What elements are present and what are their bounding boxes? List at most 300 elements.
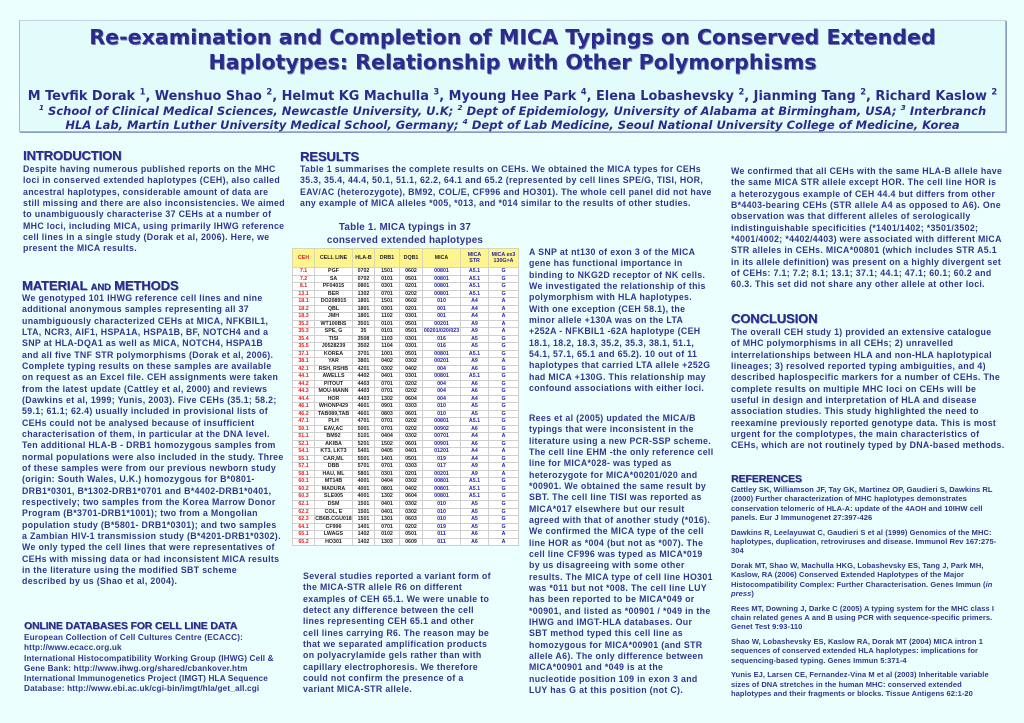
table 1: MICA typings: 0801 xyxy=(381,486,393,492)
text: references: Yunis EJ, Larsen CE, Fernandez-Vina M et al (2003) Inheritable variable xyxy=(731,670,989,679)
table 1: MICA typings: A5.1 xyxy=(469,418,480,424)
text: Rees et al: agreed with that of another study (*016). xyxy=(529,515,710,525)
text: Rees et al: *00901. We obtained the same result by xyxy=(529,481,706,491)
affiliations xyxy=(39,103,986,132)
table 1: MICA typings: G xyxy=(501,456,506,462)
table 1: MICA typings: 51.1 xyxy=(298,433,309,439)
table 1: MICA typings: WT100BIS xyxy=(321,321,346,327)
table 1: MICA typings: 004 xyxy=(437,388,446,394)
text: Rees et al: MICA*00901 and *049 is at the xyxy=(529,662,663,672)
text: introduction: present the MICA results. xyxy=(23,243,137,253)
text: variant form of R6: the MICA-STR allele R6 on different xyxy=(303,582,462,592)
table 1: MICA typings: 00201 xyxy=(434,358,449,364)
text: HLA-B allele confirmation: indistinguishable specificities (*1401/1402; *3501/3502; xyxy=(731,223,978,233)
table 1: MICA typings: HO301 xyxy=(325,539,342,545)
text: material and methods: respectively; two samples from the Korea Marrow Donor xyxy=(22,497,276,507)
table 1: MICA typings: 0701 xyxy=(381,426,393,432)
table 1: MICA typings: 1501 xyxy=(381,268,393,274)
table 1: MICA typings: 0302 xyxy=(405,508,417,514)
text: references: Rees MT, Downing J, Darke C (2005) A typing system for the MHC class I xyxy=(731,604,994,613)
table 1: MICA typings: HAU, ML xyxy=(322,471,345,477)
heading: online databases: ONLINE DATABASES FOR CELL LINE DATA xyxy=(24,621,237,632)
table 1: MICA typings: 0701 xyxy=(381,388,393,394)
text: SNP at nt130: With one exception (CEH 58.1), the xyxy=(529,304,685,314)
text: HLA-B allele confirmation: We confirmed that all CEHs with the same HLA-B allele have xyxy=(731,166,1002,176)
table 1: MICA typings: G xyxy=(501,501,506,507)
text: variant form of R6: could not confirm the presence of a xyxy=(303,673,464,683)
table 1: MICA typings: A4 xyxy=(471,448,478,454)
table 1: MICA typings: 35.3 xyxy=(298,328,309,334)
table 1: MICA typings: 016 xyxy=(437,343,446,349)
table 1: MICA typings: HLA-B xyxy=(355,255,372,261)
table 1: MICA typings: G xyxy=(501,524,506,530)
table 1: MICA typings: 1401 xyxy=(358,524,369,530)
table 1: MICA typings: A4 xyxy=(471,396,478,402)
table 1: MICA typings: A9 xyxy=(471,358,478,364)
text: HLA-B allele confirmation: a heterozygous example of CEH 44.4 but differs from other xyxy=(731,189,995,199)
text: introduction: still missing and there are also inconsistencies. We aimed xyxy=(23,198,285,208)
table 1: MICA typings: 4402 xyxy=(358,373,369,379)
table 1: MICA typings: 001 xyxy=(437,313,446,319)
table 1: MICA typings: 0401 xyxy=(381,501,393,507)
table 1: MICA typings: 57.1 xyxy=(298,463,309,469)
table 1: MICA typings: KOREA xyxy=(324,351,343,357)
table 1: MICA typings: KT3, LKT3 xyxy=(320,448,347,454)
text: references: sizes of DNA stretches in the human MHC: conserved extended xyxy=(731,680,962,689)
table 1: MICA typings: 01201 xyxy=(434,448,449,454)
text: material and methods xyxy=(22,293,284,586)
text: SNP at nt130: haplotypes that carried LTA allele +252G xyxy=(529,360,710,370)
text: SNP at nt130: polymorphism with HLA haplotypes. xyxy=(529,292,692,302)
table 1: MICA typings: 4403 xyxy=(358,396,369,402)
table 1: MICA typings: 010 xyxy=(437,516,446,522)
table 1: MICA typings: 00901 xyxy=(434,441,449,447)
table 1: MICA typings: 0202 xyxy=(405,524,417,530)
table 1: MICA typings: 65.1 xyxy=(298,531,309,537)
table 1: MICA typings: A5 xyxy=(471,343,478,349)
text: online databases: http://www.ecacc.org.uk xyxy=(24,643,122,652)
text: references: Histocompatibility Complex: Further Characterisation. Genes Immun (in xyxy=(731,580,992,589)
table 1: MICA typings: A5.1 xyxy=(469,373,480,379)
table 1: MICA typings: YAR xyxy=(328,358,339,364)
table 1: MICA typings: 0405 xyxy=(381,448,393,454)
table 1: MICA typings: CELL LINE xyxy=(320,255,347,261)
table 1: MICA typings: 4201 xyxy=(358,366,369,372)
table 1: MICA typings: 0402 xyxy=(381,358,393,364)
table 1: MICA typings: 0202 xyxy=(405,381,417,387)
table 1: MICA typings: 44.4 xyxy=(298,396,309,402)
text: references: Kaslow, RA (2006) Conserved Extended Haplotypes of the Major xyxy=(731,570,964,579)
text: SNP at nt130: 54.1, 57.1, 65.1 and 65.2). 10 out of 11 xyxy=(529,349,697,359)
table 1: MICA typings: 0303 xyxy=(405,463,417,469)
table 1: MICA typings: 0501 xyxy=(405,276,417,282)
text: Rees et al: The cell line EHM -the only reference cell xyxy=(529,447,713,457)
affiliations: HLA Lab, Martin Luther University Medical School, Germany; 4 Dept of Lab Medicine, Seoul National University College of Medicine, Korea xyxy=(65,117,960,132)
table 1: MICA typings: 0101 xyxy=(381,276,393,282)
table 1: MICA typings: 0301 xyxy=(381,283,393,289)
table 1: MICA typings: 0801 xyxy=(358,283,369,289)
text: references: conservation telomeric of HLA-A: update of the 4AOH and 10IHW cell xyxy=(731,504,983,513)
table 1: MICA typings: MICA ex3 xyxy=(492,252,515,258)
table 1: MICA typings: 4001 xyxy=(358,478,369,484)
table 1: MICA typings: 0402 xyxy=(405,486,417,492)
text: variant form of R6: Several studies reported a variant form of xyxy=(303,571,491,581)
heading: references: REFERENCES xyxy=(731,473,802,485)
table 1: MICA typings: EAV,AC xyxy=(324,426,343,432)
text: Rees et al: cell line CF996 was typed as MICA*019 xyxy=(529,549,703,559)
text: SNP at nt130: A SNP at nt130 of exon 3 of the MICA xyxy=(529,247,695,257)
table 1: MICA typings: A6 xyxy=(471,539,478,545)
affiliations: 1 School of Clinical Medical Sciences, Newcastle University, U.K; 2 Dept of Epidemiology, University of Alabama at Birmingham, USA; 3 Interbranch xyxy=(39,103,986,118)
table 1: MICA typings: PITOUT xyxy=(324,381,343,387)
table 1: MICA typings: 5001 xyxy=(358,426,369,432)
text: conclusion: useful in design and interpretation of HLA and disease xyxy=(731,395,977,405)
table 1: MICA typings: A5.1 xyxy=(469,276,480,282)
text: SNP at nt130: binding to NKG2D receptor of NK cells. xyxy=(529,270,705,280)
title panel xyxy=(19,20,1006,132)
table 1: MICA typings: 0404 xyxy=(381,478,393,484)
table 1: MICA typings: 0701 xyxy=(381,381,393,387)
text: HLA-B allele confirmation: *4001/4002; *4402/4403) were associated with different MICA xyxy=(731,234,1002,244)
table 1: MICA typings: G xyxy=(501,411,506,417)
table 1: MICA typings: 46.2 xyxy=(298,411,309,417)
table 1: MICA typings: 0404 xyxy=(381,433,393,439)
table 1: MICA typings: HOR xyxy=(328,396,339,402)
text: material and methods: and all five TNF STR polymorphisms (Dorak et al, 2006). xyxy=(22,350,273,360)
table 1: MICA typings: G xyxy=(501,336,506,342)
text: material and methods: on request as an Excel file. CEH assignments were taken xyxy=(22,372,278,382)
text: SNP at nt130: We investigated the relationship of this xyxy=(529,281,706,291)
table 1: MICA typings: 00801 xyxy=(434,291,449,297)
table 1: MICA typings: A xyxy=(502,328,505,334)
text: variant form of R6: capillary electrophoresis. We therefore xyxy=(303,662,478,672)
table 1: MICA typings: G xyxy=(501,373,506,379)
table 1: MICA typings: 1501 xyxy=(358,508,369,514)
text: introduction: ancestral haplotypes, considerable amount of data are xyxy=(23,187,268,197)
table 1: MICA typings: 00801 xyxy=(434,351,449,357)
text: Rees et al: nucleotide position 109 in exon 3 and xyxy=(529,674,698,684)
table 1: MICA typings: 37.1 xyxy=(298,351,309,357)
table 1: MICA typings: 3502 xyxy=(358,343,369,349)
table 1: MICA typings: A6 xyxy=(471,441,478,447)
text: results xyxy=(300,164,712,208)
text: variant form of R6: variant MICA-STR allele. xyxy=(303,684,412,694)
table 1: MICA typings: 55.1 xyxy=(298,456,309,462)
table 1: MICA typings: 010 xyxy=(437,298,446,304)
table 1: MICA typings: 35.5 xyxy=(298,343,309,349)
table 1: MICA typings: 62.2 xyxy=(298,508,309,514)
text: material and methods: SNP at HLA-DQA1 as well as MICA, NOTCH4, HSPA1B xyxy=(22,338,263,348)
table 1: MICA typings: G xyxy=(501,388,506,394)
table 1: MICA typings: 0401 xyxy=(381,508,393,514)
table 1: MICA typings: G xyxy=(501,516,506,522)
text: Rees et al: results. The MICA type of cell line HO301 xyxy=(529,572,713,582)
text: Rees et al: typings that were inconsistent in the xyxy=(529,424,694,434)
text: HLA-B allele confirmation: of CEHs: 7.1; 7.2; 8.1; 13.1; 37.1; 44.1; 47.1; 60.1; 60.2 and xyxy=(731,268,992,278)
table 1: MICA typings: COL, E xyxy=(325,508,342,514)
table 1: MICA typings: 001 xyxy=(437,306,446,312)
table 1: MICA typings: 47.1 xyxy=(298,418,309,424)
table 1: MICA typings: 44.1 xyxy=(298,373,309,379)
table 1: MICA typings: A xyxy=(502,448,505,454)
text: references: (2000) Further characterization of MHC haplotypes demonstrates xyxy=(731,494,967,503)
table 1: MICA typings: 011 xyxy=(437,539,446,545)
table 1: MICA typings: A xyxy=(502,539,505,545)
text: HLA-B allele confirmation: observation was that different alleles of serologically xyxy=(731,211,971,221)
table 1: MICA typings: 0302 xyxy=(405,358,417,364)
table 1: MICA typings: AKIBA xyxy=(325,441,342,447)
table 1: MICA typings: 00201 xyxy=(434,471,449,477)
table 1: MICA typings: TISI xyxy=(329,336,338,342)
table 1: MICA typings: A9 xyxy=(471,463,478,469)
text: results: Table 1 summarises the complete results on CEHs. We obtained the MICA types for CEHs xyxy=(300,164,701,174)
table 1: MICA typings: 004 xyxy=(437,396,446,402)
table 1: MICA typings: 60.1 xyxy=(298,478,309,484)
text: SNP at nt130 xyxy=(529,247,710,393)
text: online databases: International Immunogenetics Project (IMGT) HLA Sequence xyxy=(24,674,268,683)
table 1: MICA typings: A6 xyxy=(471,531,478,537)
table 1: MICA typings: 0301 xyxy=(381,471,393,477)
text: results: EAV/AC (heterozygote), BM92, COL/E, CF996 and HO301). The whole cell panel did not have xyxy=(300,187,712,197)
table 1: MICA typings: A5 xyxy=(471,524,478,530)
table 1: MICA typings: A5.1 xyxy=(469,478,480,484)
table 1: MICA typings: 4403 xyxy=(358,381,369,387)
text: introduction: loci in conserved extended haplotypes (CEH), also called xyxy=(23,175,280,185)
table 1: MICA typings: 00801 xyxy=(434,268,449,274)
text: Rees et al: SBT method typed this cell line as xyxy=(529,628,683,638)
text: Rees et al: has been reported to be MICA*049 or xyxy=(529,594,695,604)
table 1: MICA typings xyxy=(292,248,519,546)
table 1: MICA typings: 00801 xyxy=(434,486,449,492)
table 1: MICA typings: A4 xyxy=(471,433,478,439)
table 1: MICA typings: 00201 xyxy=(434,321,449,327)
table 1: MICA typings: 0501 xyxy=(405,351,417,357)
table 1: MICA typings: JMH xyxy=(328,313,339,319)
table 1: MICA typings: 42.1 xyxy=(298,366,309,372)
text: variant form of R6 xyxy=(303,571,491,694)
table 1: MICA typings: STR xyxy=(469,258,480,264)
text: material and methods: Complete typing results on these samples are available xyxy=(22,361,272,371)
table 1: MICA typings: 0601 xyxy=(405,411,417,417)
table 1: MICA typings: 3508 xyxy=(358,336,369,342)
text: Rees et al: *00901, and listed as *00901 / *049 in the xyxy=(529,606,711,616)
table 1: MICA typings: 0602 xyxy=(405,298,417,304)
table 1: MICA typings: DQB1 xyxy=(404,255,418,261)
table 1: MICA typings: MT14B xyxy=(325,478,342,484)
text: introduction: cell lines in a single study (Dorak et al, 2006). Here, we xyxy=(23,232,269,242)
table 1: MICA typings: 0604 xyxy=(405,493,417,499)
table 1: MICA typings: 00801 xyxy=(434,283,449,289)
table 1: MICA typings: G xyxy=(501,276,506,282)
text: introduction: Despite having numerous published reports on the MHC xyxy=(23,164,276,174)
text: references: Genet Test 9:93-110 xyxy=(731,622,802,631)
text: references: haplotypes, duplication, retroviruses and disease. Immunol Rev 167:275- xyxy=(731,537,996,546)
table 1: MICA typings: A5 xyxy=(471,336,478,342)
text: material and methods: 59.1; 61.1; 62.4) usually included in provisional lists of xyxy=(22,406,268,416)
table 1: MICA typings: 0302 xyxy=(405,478,417,484)
text: Rees et al: heterozygote for MICA*00201/020 and xyxy=(529,470,697,480)
text: references: 304 xyxy=(731,546,744,555)
text: HLA-B allele confirmation xyxy=(731,166,1002,289)
text: conclusion: of MHC polymorphisms in all CEHs; 2) unravelled xyxy=(731,338,953,348)
table 1: MICA typings: 0401 xyxy=(405,448,417,454)
text: material and methods: (Dawkins et al, 1999; Yunis, 2003). Five CEHs (35.1; 58.2; xyxy=(22,395,277,405)
table 1: MICA typings: 58.1 xyxy=(298,471,309,477)
text: conclusion: association studies. This study highlighted the need to xyxy=(731,406,979,416)
table caption: conserved extended haplotypes xyxy=(327,235,483,246)
table 1: MICA typings: A xyxy=(502,298,505,304)
text: material and methods: Program (B*3701-DRB1*1001); two from a Mongolian xyxy=(22,508,258,518)
text: material and methods: from the latest update (Cattley et al, 2000) and reviews xyxy=(22,384,267,394)
table 1: MICA typings: 1502 xyxy=(381,441,393,447)
table 1: MICA typings: 00801 xyxy=(434,493,449,499)
table 1: MICA typings: G xyxy=(501,403,506,409)
table 1: MICA typings: 0301 xyxy=(381,306,393,312)
table 1: MICA typings: A5.1 xyxy=(469,351,480,357)
table 1: MICA typings: 65.2 xyxy=(298,539,309,545)
table 1: MICA typings: 4601 xyxy=(358,403,369,409)
text: Rees et al: allele A6). The only difference between xyxy=(529,651,703,661)
authors: M Tevfik Dorak 1, Wenshuo Shao 2, Helmut KG Machulla 3, Myoung Hee Park 4, Elena Lobashevsky 2, Jianming Tang 2, Richard Kaslow 2 xyxy=(28,87,997,104)
table 1: MICA typings: A5.1 xyxy=(469,493,480,499)
table 1: MICA typings: 44.3 xyxy=(298,388,309,394)
table 1: MICA typings: MICA xyxy=(468,252,481,258)
table 1: MICA typings: 1401 xyxy=(381,456,393,462)
text: references: Cattley SK, Williamson JF, Tay GK, Martinez OP, Gaudieri S, Dawkins RL xyxy=(731,485,993,494)
table 1: MICA typings: 00801 xyxy=(434,373,449,379)
table 1: MICA typings: 3701 xyxy=(358,351,369,357)
text: online databases: European Collection of Cell Cultures Centre (ECACC): xyxy=(24,633,243,642)
text: HLA-B allele confirmation: 60.3. This set did not share any other allele at other loci. xyxy=(731,279,985,289)
table 1: MICA typings: 1501 xyxy=(358,516,369,522)
text: conclusion: reexamine previously reported genotype data. This is most xyxy=(731,418,996,428)
table 1: MICA typings: 4701 xyxy=(358,418,369,424)
table 1: MICA typings: A4 xyxy=(471,298,478,304)
table 1: MICA typings: A xyxy=(502,306,505,312)
table 1: MICA typings: 0609 xyxy=(405,539,417,545)
poster title xyxy=(89,25,936,74)
table 1: MICA typings: 0102 xyxy=(381,531,393,537)
table 1: MICA typings: 1801 xyxy=(358,298,369,304)
table 1: MICA typings: 004 xyxy=(437,366,446,372)
text: conclusion: The overall CEH study 1) provided an extensive catalogue xyxy=(731,327,991,337)
table 1: MICA typings: DBB xyxy=(328,463,339,469)
text: variant form of R6: lines representing CEH 65.1 and other xyxy=(303,616,474,626)
table 1: MICA typings: A6 xyxy=(471,426,478,432)
table 1: MICA typings: 00801 xyxy=(434,276,449,282)
table 1: MICA typings: 35 xyxy=(361,328,366,334)
table 1: MICA typings: 0501 xyxy=(405,456,417,462)
table caption: Table 1. MICA typings in 37 xyxy=(339,222,471,233)
table 1: MICA typings: 1102 xyxy=(381,313,393,319)
text: Rees et al: Rees et al (2005) updated the MICA/B xyxy=(529,413,696,423)
table 1: MICA typings: A9 xyxy=(471,321,478,327)
text: material and methods: CEHs could not be analysed because of insufficient xyxy=(22,418,255,428)
table 1: MICA typings: 0603 xyxy=(405,516,417,522)
text: variant form of R6: that we separated amplification products xyxy=(303,639,487,649)
table 1: MICA typings: 0501 xyxy=(405,328,417,334)
table 1: MICA typings: 0701 xyxy=(381,524,393,530)
table 1: MICA typings: 00701 xyxy=(434,433,449,439)
table 1: MICA typings: 0702 xyxy=(358,268,369,274)
table 1: MICA typings: 0301 xyxy=(405,313,417,319)
table 1: MICA typings: 0303 xyxy=(405,403,417,409)
table 1: MICA typings: A5.1 xyxy=(469,291,480,297)
text: results: 35.3, 35.4, 44.4, 50.1, 51.1, 62.2, 64.1 and 65.2 (represented by cell lines SPE/G, TISI, HOR, xyxy=(300,175,703,185)
table 1: MICA typings: 18.2 xyxy=(298,306,309,312)
table 1: MICA typings: A6 xyxy=(471,366,478,372)
text: material and methods: Ten additional HLA-B - DRB1 homozygous samples from xyxy=(22,440,276,450)
table 1: MICA typings: 1501 xyxy=(381,298,393,304)
table 1: MICA typings: CB6B.CGU018 xyxy=(315,516,352,522)
table 1: MICA typings: 0201 xyxy=(405,283,417,289)
text: references: sequences of conserved extended HLA haplotypes: implications for xyxy=(731,646,978,655)
text: references: press) xyxy=(731,589,754,598)
table 1: MICA typings: TAB089,TAB xyxy=(318,411,349,417)
text: Rees et al: MICA*017 elsewhere but our result xyxy=(529,504,685,514)
text: material and methods: (origin: South Wales, U.K.) homozygous for B*0801- xyxy=(22,474,255,484)
text: online databases: International Histocompatibility Working Group (IHWG) Cell & xyxy=(24,654,274,663)
text: references xyxy=(730,485,996,698)
table 1: MICA typings: A5.1 xyxy=(469,268,480,274)
text: HLA-B allele confirmation: the same MICA STR allele except HOR. The cell line HOR is xyxy=(731,177,996,187)
text: references: haplotypes and their fragments or blocks. Tissue Antigens 62:1-20 xyxy=(731,689,973,698)
table 1: MICA typings: 13.1 xyxy=(298,291,309,297)
table 1: MICA typings: 017 xyxy=(437,463,446,469)
table 1: MICA typings: 1302 xyxy=(381,396,393,402)
table 1: MICA typings: 010 xyxy=(437,403,446,409)
table 1: MICA typings: CEH xyxy=(298,255,309,261)
table 1: MICA typings: A5 xyxy=(471,516,478,522)
text: material and methods: described by us (Shao et al, 2004). xyxy=(22,576,177,586)
text: conclusion: interrelationships between HLA and non-HLA haplotypical xyxy=(731,350,992,360)
table 1: MICA typings: 5201 xyxy=(358,441,369,447)
table 1: MICA typings: 0402 xyxy=(405,366,417,372)
text: conclusion: lineages; 3) resolved reported typing ambiguities, and 4) xyxy=(731,361,986,371)
text: online databases xyxy=(24,633,274,693)
table 1: MICA typings: G xyxy=(501,426,506,432)
table 1: MICA typings: A xyxy=(502,358,505,364)
table 1: MICA typings: 019 xyxy=(437,524,446,530)
text: Rees et al: SBT. The cell line TISI was reported as xyxy=(529,492,702,502)
table 1: MICA typings: A xyxy=(502,321,505,327)
table 1: MICA typings: 44.2 xyxy=(298,381,309,387)
table 1: MICA typings: G xyxy=(501,351,506,357)
text: material and methods: unambiguously characterized CEHs at MICA, NFKBIL1, xyxy=(22,316,268,326)
table 1: MICA typings: MICA xyxy=(435,255,448,261)
table 1: MICA typings: G xyxy=(501,441,506,447)
text: Rees et al: homozygous for MICA*00901 (and STR xyxy=(529,640,702,650)
table 1: MICA typings: 1001 xyxy=(381,351,393,357)
table 1: MICA typings: PGF xyxy=(328,268,339,274)
text: SNP at nt130: minor allele +130A was on the LTA xyxy=(529,315,683,325)
table 1: MICA typings: A9 xyxy=(471,328,478,334)
text: material and methods: LTA, NCR3, AIF1, HSPA1A, HSPA1B, BF, NOTCH4 and a xyxy=(22,327,268,337)
text: Rees et al: We confirmed the MICA type of the cell xyxy=(529,526,704,536)
table 1: MICA typings: G xyxy=(501,478,506,484)
text: introduction xyxy=(23,164,285,253)
table 1: MICA typings: G xyxy=(501,508,506,514)
table 1: MICA typings: 0301 xyxy=(405,343,417,349)
table 1: MICA typings: A xyxy=(502,313,505,319)
table 1: MICA typings: 0202 xyxy=(405,426,417,432)
text: Rees et al: IHWG and IMGT-HLA databases. Our xyxy=(529,617,692,627)
table 1: MICA typings: 0101 xyxy=(381,321,393,327)
text: introduction: MHC loci, including MICA, using primarily IHWG reference xyxy=(23,221,284,231)
table 1: MICA typings: 50.1 xyxy=(298,426,309,432)
table 1: MICA typings: 010 xyxy=(437,508,446,514)
table 1: MICA typings: 1103 xyxy=(381,336,393,342)
